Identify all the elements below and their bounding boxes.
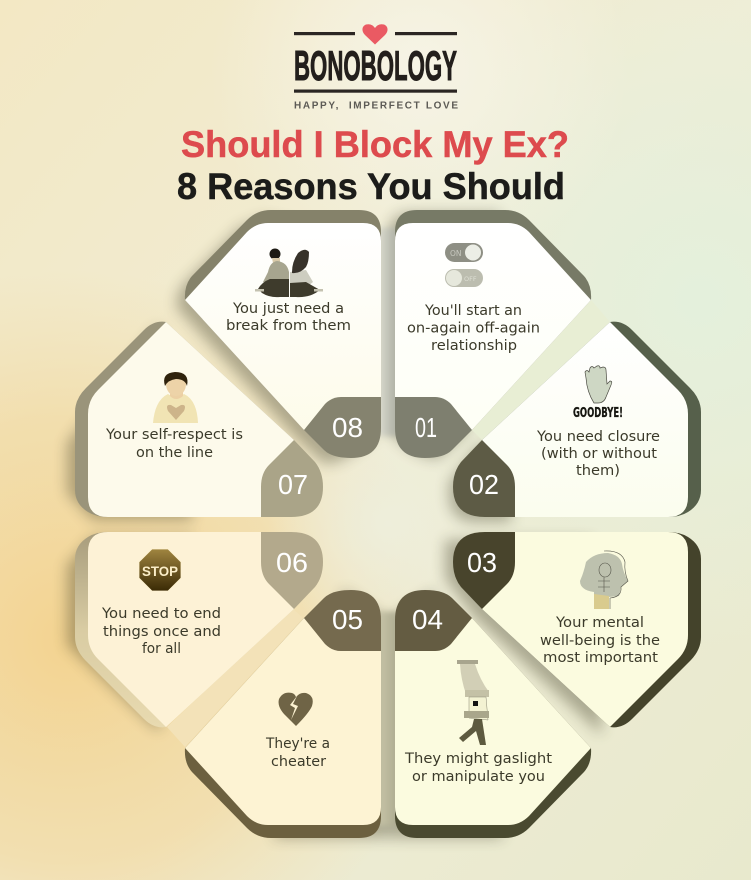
number 07: 07 (278, 469, 308, 500)
text (536, 429, 660, 479)
text: cheater (271, 754, 326, 770)
text: break from them (226, 318, 351, 334)
text: relationship (431, 338, 517, 354)
title (177, 124, 569, 207)
title line 1: Should I Block My Ex? (181, 124, 569, 165)
text: or manipulate you (412, 769, 545, 785)
text: They might gaslight (404, 751, 553, 767)
title line 2: 8 Reasons You Should (177, 166, 565, 207)
icon: person holding heart (153, 372, 198, 423)
icon: on and off toggles (445, 243, 483, 287)
panel: 03 mental well-being (453, 532, 701, 727)
text: Your self-respect is (105, 427, 243, 443)
icon: heart (362, 24, 388, 44)
number 03: 03 (467, 547, 497, 578)
text: You'll start an (424, 303, 522, 319)
text (407, 303, 540, 354)
text (105, 427, 243, 461)
icon: stop sign (139, 549, 181, 591)
icon: goodbye hand (573, 366, 623, 421)
number 02: 02 (469, 469, 499, 500)
text: You need closure (536, 429, 660, 445)
text: things once and (103, 624, 221, 640)
icon: on and off toggles: OFF (464, 275, 477, 283)
text: Your mental (555, 615, 644, 631)
panel: 05 cheater (185, 590, 381, 838)
panel: 06 end things (75, 532, 323, 727)
text (226, 301, 351, 334)
text: most important (543, 650, 659, 666)
icon: stop sign: STOP (142, 563, 178, 579)
icon: puppet on hand (457, 660, 489, 745)
icon: broken heart (279, 693, 313, 726)
icon: couple sitting back to back (255, 248, 323, 297)
panel: 08 break (185, 210, 381, 458)
panel: 01 on-again off-again (395, 210, 591, 458)
icon: goodbye hand: GOODBYE! (573, 406, 623, 421)
text: well-being is the (540, 633, 660, 649)
text: You just need a (232, 301, 344, 317)
text: on the line (136, 445, 213, 461)
panel: 02 closure (453, 322, 701, 517)
number 04: 04 (412, 604, 443, 635)
text: (with or without (541, 446, 658, 462)
text: on-again off-again (407, 320, 540, 336)
logo wordmark: BONOBOLOGY (294, 42, 457, 89)
text (404, 751, 553, 785)
text: for all (142, 641, 181, 657)
text (265, 736, 330, 770)
text: They're a (265, 736, 330, 752)
number 01: 01 (415, 412, 437, 443)
text (101, 606, 221, 657)
panel: 07 self-respect (75, 322, 323, 517)
icon: head with plant (580, 551, 628, 609)
icon: on and off toggles: ON (450, 249, 462, 258)
panel: 04 gaslight (395, 590, 591, 838)
number 05: 05 (332, 604, 363, 635)
text: You need to end (101, 606, 221, 622)
tagline: HAPPY, IMPERFECT LOVE (294, 100, 458, 112)
logo (294, 24, 458, 112)
text (540, 615, 660, 666)
number 08: 08 (332, 412, 363, 443)
number 06: 06 (276, 547, 308, 578)
text: them) (576, 463, 620, 479)
